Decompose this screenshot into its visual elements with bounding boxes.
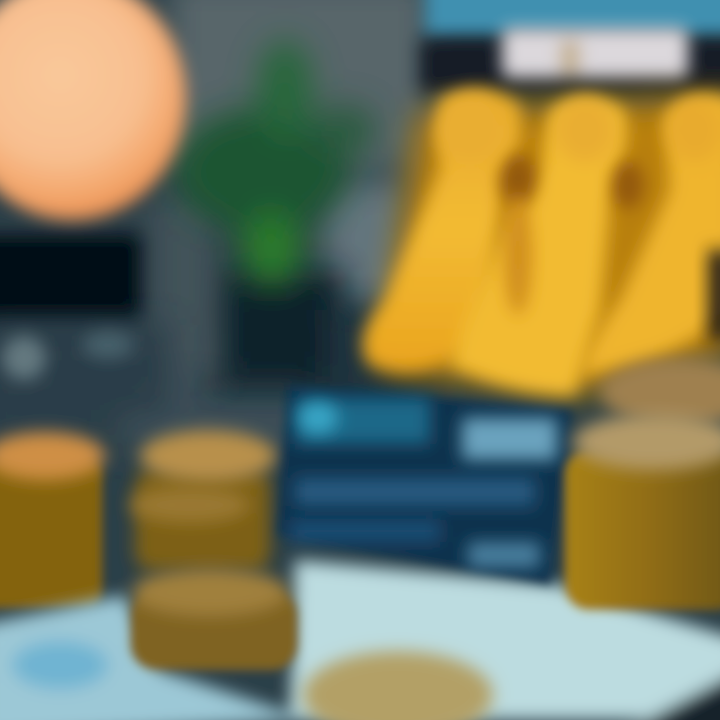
gold bars: [363, 89, 720, 395]
blue package top: [420, 0, 720, 93]
dark base under lamp: [0, 235, 170, 415]
left coin stack: [0, 432, 105, 608]
white label: [502, 28, 688, 78]
right gold cylinder: [565, 358, 720, 610]
middle coin stack: [130, 430, 276, 570]
glowing orange sphere: [0, 0, 186, 220]
blue financial card: [278, 385, 572, 585]
bottom coin: [303, 651, 493, 720]
light table surface: [0, 560, 720, 720]
lower coin stack: [130, 568, 298, 670]
green plant: [174, 40, 377, 286]
